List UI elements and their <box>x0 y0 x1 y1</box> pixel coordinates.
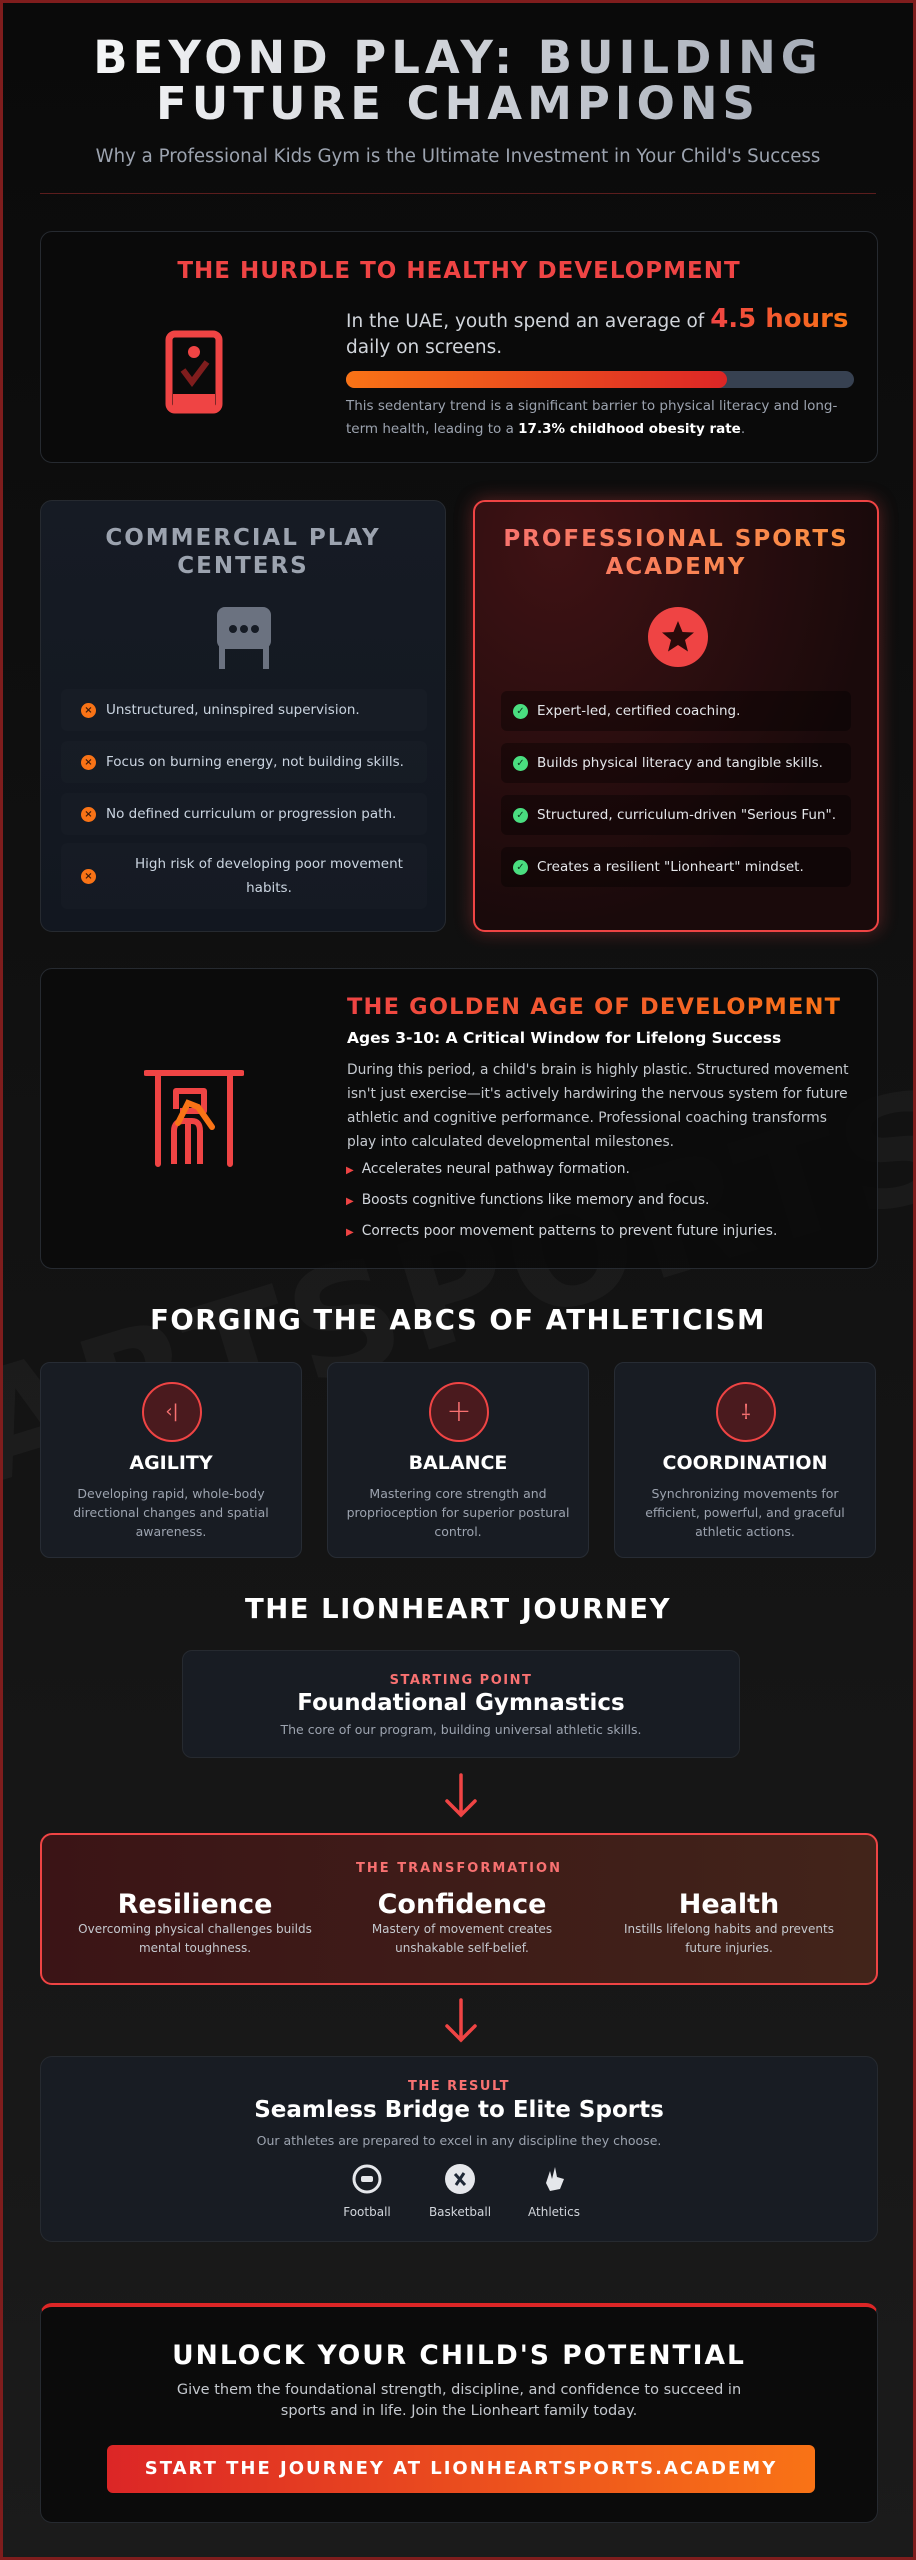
heading: THE GOLDEN AGE OF DEVELOPMENT <box>347 994 841 1020</box>
icon: cart <box>217 607 271 669</box>
list: cons: × <box>84 870 93 882</box>
icon: phone <box>166 330 222 414</box>
card: coordination <box>614 1362 876 1558</box>
heading: PROFESSIONAL SPORTS <box>503 526 849 552</box>
list: cons: Unstructured, uninspired supervision. <box>106 702 360 718</box>
stat text: In the UAE, youth spend an average of 4.5 hours <box>346 304 848 334</box>
column: health: Instills lifelong habits and prevents future injuries. <box>624 1922 834 1955</box>
column: resilience: Overcoming physical challenges builds mental toughness. <box>78 1922 312 1955</box>
card: agility: AGILITY <box>129 1452 213 1474</box>
icon: coordination <box>716 1382 776 1442</box>
icon: agility: ‹| <box>165 1401 179 1422</box>
icon: balance: + <box>446 1394 472 1429</box>
box: starting point: The core of our program, building universal athletic skills. <box>280 1722 642 1737</box>
column: health: Health <box>679 1889 779 1920</box>
note text: This sedentary trend is a significant barrier to physical literacy and long-term health, leading to a 17.3% childhood obesity rate. <box>346 398 837 437</box>
paragraph: During this period, a child's brain is highly plastic. Structured movement isn't just exercise—it's actively hardwiring the nervous system for future athletic and cognitive performance. Professional coaching transforms play into calculated developmental milestones. <box>347 1062 848 1150</box>
stat text: daily on screens. <box>346 337 502 358</box>
box: starting point <box>182 1650 740 1758</box>
list: cons: No defined curriculum or progression path. <box>106 806 396 822</box>
box: starting point: STARTING POINT <box>390 1673 532 1688</box>
column: health <box>624 1889 834 1955</box>
box: result <box>40 2056 878 2242</box>
bullets: benefits: ▶ Boosts cognitive functions like memory and focus. <box>346 1192 709 1208</box>
box: result: THE RESULT <box>408 2079 510 2094</box>
icon: basketball <box>429 2164 491 2219</box>
button: START THE JOURNEY AT LIONHEARTSPORTS.ACADEMY <box>145 2458 777 2479</box>
stat text <box>346 304 848 358</box>
heading <box>105 525 381 579</box>
list: pros: ✓ <box>516 706 525 716</box>
panel: golden age <box>40 968 878 1269</box>
list: cons: Focus on burning energy, not building skills. <box>106 754 404 770</box>
list: pros: Expert-led, certified coaching. <box>537 703 740 719</box>
heading <box>475 525 877 581</box>
panel: hurdle <box>40 231 878 463</box>
box: transformation: THE TRANSFORMATION <box>356 1861 562 1876</box>
card: agility <box>40 1362 302 1558</box>
list: pros: ✓ <box>516 810 525 820</box>
column: resilience: Resilience <box>118 1889 272 1920</box>
column: confidence: Confidence <box>378 1889 546 1920</box>
column: confidence <box>372 1889 552 1955</box>
subheading: Ages 3-10: A Critical Window for Lifelong Success <box>347 1029 781 1047</box>
heading: journey: THE LIONHEART JOURNEY <box>245 1593 671 1625</box>
list: cons: × <box>84 808 93 820</box>
icon: balance <box>429 1382 489 1442</box>
title <box>3 35 913 127</box>
card: balance: Mastering core strength and proprioception for superior postural control. <box>347 1486 569 1539</box>
heading: COMMERCIAL PLAY <box>105 525 381 551</box>
icon: athletics: Athletics <box>528 2205 580 2219</box>
heading: ACADEMY <box>606 554 746 580</box>
icon: star badge <box>648 607 708 667</box>
icon: basketball: Basketball <box>429 2205 491 2219</box>
list: pros: Creates a resilient "Lionheart" mindset. <box>537 859 804 875</box>
heading: UNLOCK YOUR CHILD'S POTENTIAL <box>172 2340 746 2371</box>
subtitle: Why a Professional Kids Gym is the Ultimate Investment in Your Child's Success <box>96 146 820 167</box>
box: starting point: Foundational Gymnastics <box>297 1690 625 1716</box>
list: pros: Structured, curriculum-driven "Serious Fun". <box>537 807 836 823</box>
card: balance: BALANCE <box>409 1452 507 1474</box>
list: pros: ✓ <box>516 758 525 768</box>
card: balance <box>327 1362 589 1558</box>
list: cons: High risk of developing poor movement habits. <box>135 856 403 896</box>
box: result: Seamless Bridge to Elite Sports <box>254 2097 664 2123</box>
card: agility: Developing rapid, whole-body directional changes and spatial awareness. <box>73 1486 269 1539</box>
panel: CTA <box>40 2303 878 2523</box>
icon: gym frame <box>144 1070 244 1167</box>
icon: coordination: ⸸ <box>741 1400 751 1424</box>
arrow <box>445 1998 477 2042</box>
bullets: benefits <box>346 1161 777 1239</box>
list: cons <box>81 702 404 896</box>
card: coordination: COORDINATION <box>663 1452 827 1474</box>
title: FUTURE CHAMPIONS <box>156 77 760 130</box>
bullets: benefits: ▶ Accelerates neural pathway formation. <box>346 1161 630 1177</box>
list: cons: × <box>84 704 93 716</box>
heading: CENTERS <box>177 553 309 579</box>
icon: agility <box>142 1382 202 1442</box>
heading: hurdle: THE HURDLE TO HEALTHY DEVELOPMENT <box>177 258 741 284</box>
list: cons: × <box>84 756 93 768</box>
list: pros: ✓ <box>516 862 525 872</box>
text: Give them the foundational strength, discipline, and confidence to succeed in sports and in life. Join the Lionheart family today. <box>177 2382 741 2419</box>
title: BEYOND PLAY: BUILDING <box>93 31 823 84</box>
bullets: benefits: ▶ Corrects poor movement patterns to prevent future injuries. <box>346 1223 777 1239</box>
column: resilience <box>78 1889 312 1955</box>
box: transformation <box>40 1833 878 1985</box>
panel: commercial play centers <box>40 500 446 932</box>
icon: football <box>343 2164 391 2219</box>
icon: football: Football <box>343 2205 391 2219</box>
column: confidence: Mastery of movement creates unshakable self-belief. <box>372 1922 552 1955</box>
arrow <box>445 1773 477 1818</box>
card: coordination: Synchronizing movements for efficient, powerful, and graceful athletic actions. <box>645 1486 845 1539</box>
icon: athletics <box>528 2167 580 2219</box>
panel: professional sports academy <box>473 500 879 932</box>
list: pros: Builds physical literacy and tangible skills. <box>537 755 823 771</box>
progress bar <box>346 371 854 388</box>
box: result: Our athletes are prepared to excel in any discipline they choose. <box>257 2133 661 2148</box>
heading: ABCs: FORGING THE ABCS OF ATHLETICISM <box>150 1304 766 1336</box>
list: pros <box>501 691 851 887</box>
button <box>107 2445 815 2493</box>
